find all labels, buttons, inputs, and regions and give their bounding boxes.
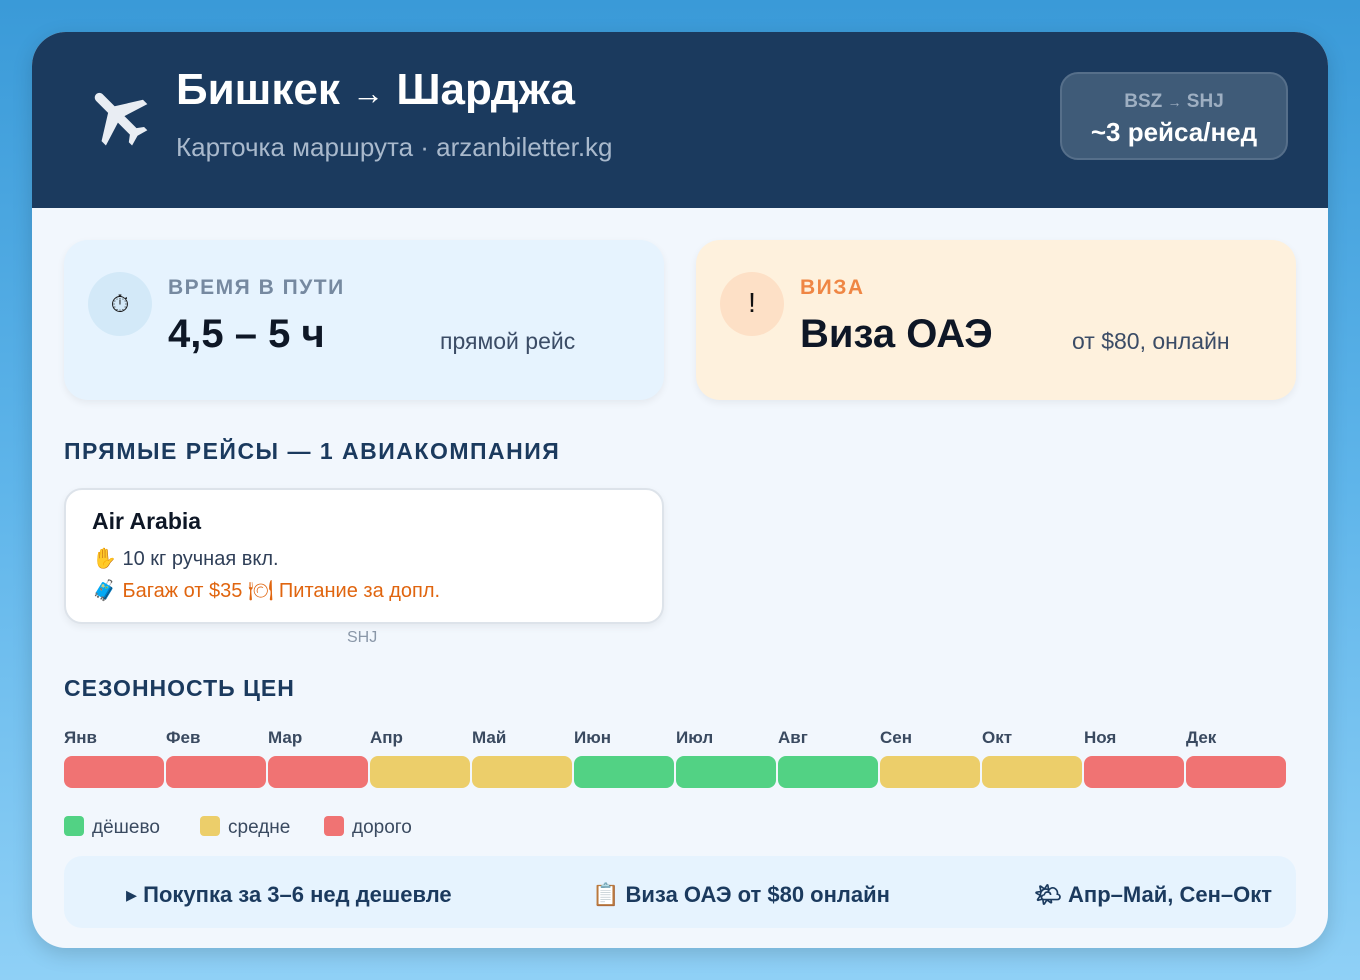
legend: средне [228, 817, 290, 838]
chart: monthly price bar: Ноя [1084, 728, 1116, 747]
badge: flights per week: BSZ → SHJ [1124, 91, 1224, 112]
chart: monthly price bar: Апр [370, 728, 403, 747]
label: ВИЗА [800, 276, 865, 299]
chart: monthly price bar [64, 728, 1286, 788]
extras: 🧳 Багаж от $35 🍽 Питание за допл. [92, 580, 440, 602]
airport label: SHJ [347, 629, 377, 646]
icon: exclamation: ! [748, 287, 756, 318]
chart: monthly price bar: Авг [778, 728, 808, 747]
badge: flights per week [1060, 72, 1288, 160]
chart: monthly price bar: Июл [676, 728, 713, 747]
chart: monthly price bar: Окт [982, 728, 1012, 747]
chart: monthly price bar: Янв [64, 728, 97, 747]
icon: exclamation [720, 272, 784, 336]
heading: direct flights: ПРЯМЫЕ РЕЙСЫ — 1 АВИАКОМПАНИЯ [64, 438, 560, 464]
note: от $80, онлайн [1072, 328, 1230, 354]
header [32, 32, 1328, 208]
tip: buy early: ▸ Покупка за 3–6 нед дешевле [126, 882, 452, 907]
panel: visa [696, 240, 1296, 400]
label: ВРЕМЯ В ПУТИ [168, 276, 345, 299]
airline name: Air Arabia [92, 508, 201, 534]
tip: season: 🌤 Апр–Май, Сен–Окт [1034, 882, 1272, 907]
title: Бишкек → Шарджа [176, 65, 575, 114]
value: 4,5 – 5 ч [168, 312, 325, 356]
legend: дорого [352, 817, 412, 838]
footer tips [64, 856, 1296, 928]
panel: travel time [64, 240, 664, 400]
legend [64, 816, 412, 838]
note: прямой рейс [440, 328, 575, 354]
icon: plane [94, 92, 148, 146]
value: Виза ОАЭ [800, 312, 993, 356]
chart: monthly price bar: Сен [880, 728, 912, 747]
chart: monthly price bar: Фев [166, 728, 200, 747]
chart: monthly price bar: Мар [268, 728, 302, 747]
chart: monthly price bar: Май [472, 728, 506, 747]
heading: price seasonality: СЕЗОННОСТЬ ЦЕН [64, 675, 295, 701]
badge: flights per week: ~3 рейса/нед [1091, 117, 1257, 147]
chart: monthly price bar: Дек [1186, 728, 1216, 747]
icon: stopwatch: ⏱ [111, 290, 129, 318]
legend: дёшево [92, 817, 160, 838]
hand baggage: ✋ 10 кг ручная вкл. [92, 548, 279, 570]
icon: stopwatch [88, 272, 152, 336]
tip: visa: 📋 Виза ОАЭ от $80 онлайн [592, 882, 890, 907]
subtitle: Карточка маршрута · arzanbiletter.kg [176, 132, 613, 162]
chart: monthly price bar: Июн [574, 728, 611, 747]
panel: airline Air Arabia [64, 488, 664, 624]
